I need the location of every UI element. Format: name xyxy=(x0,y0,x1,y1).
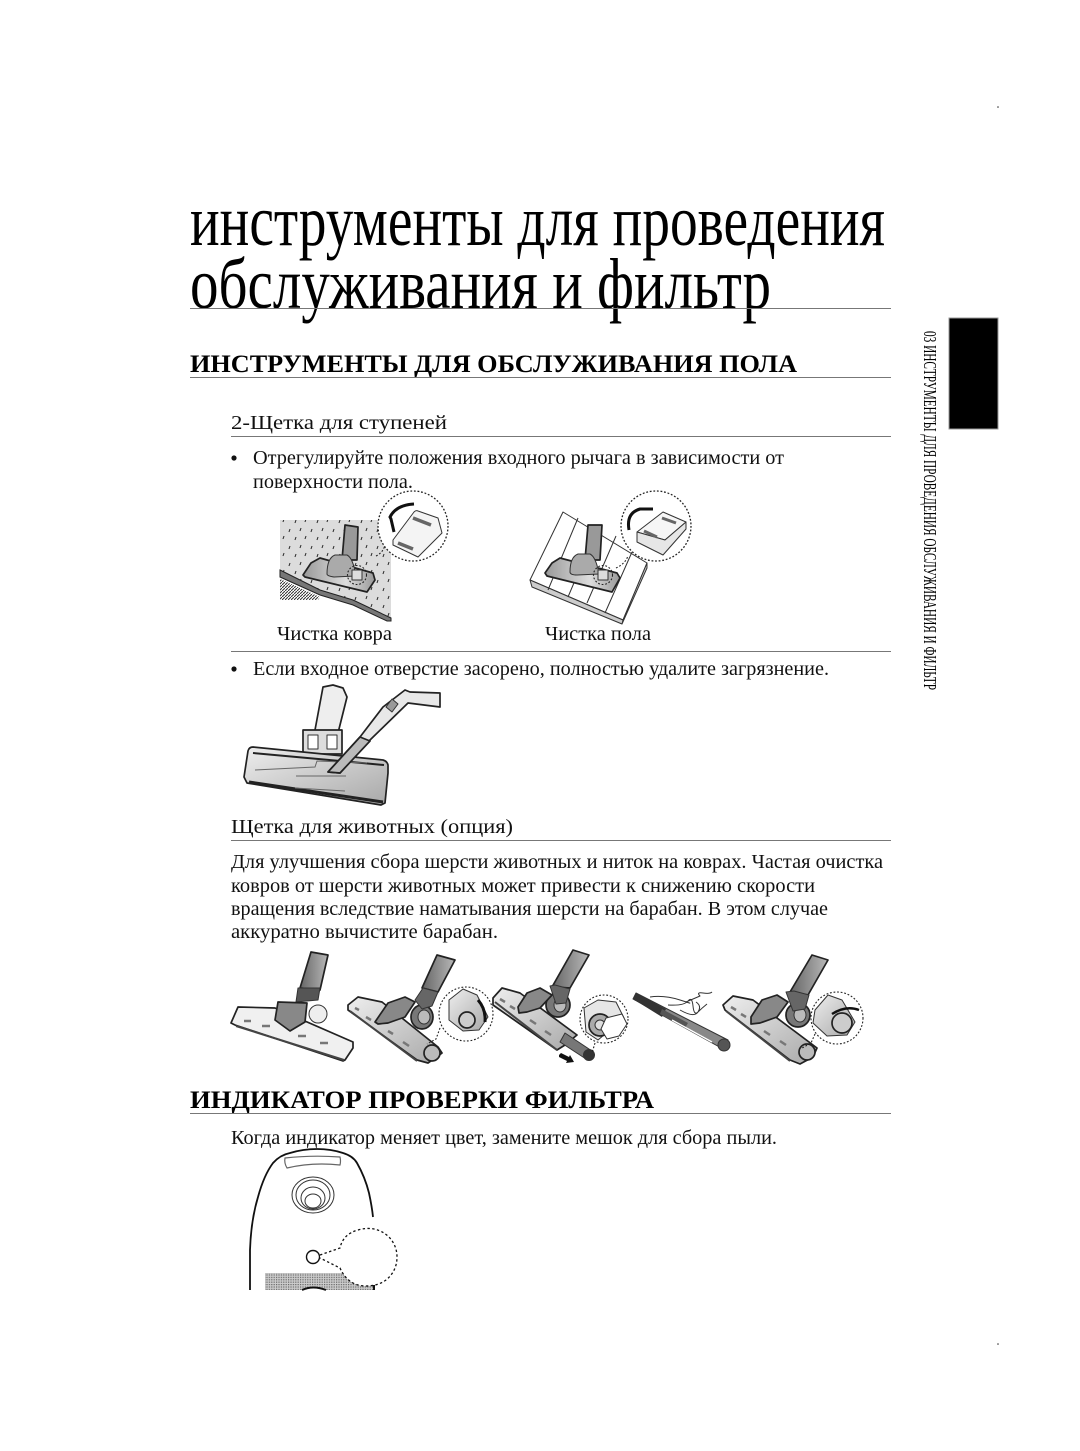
title: инструменты для проведения xyxy=(190,181,885,261)
title: обслуживания и фильтр xyxy=(190,244,771,324)
text block: pet brush description: ковров от шерсти животных может привести к снижению скорости xyxy=(231,875,815,897)
text block: pet brush description xyxy=(231,851,883,943)
title xyxy=(190,181,885,324)
illustration: pet brush step 5 xyxy=(723,955,863,1064)
text block: pet brush description: вращения вследствие наматывания шерсти на барабан. В этом случае xyxy=(231,898,828,920)
heading: filter indicator: ИНДИКАТОР ПРОВЕРКИ ФИЛЬТРА xyxy=(190,1087,654,1114)
caption: floor: Чистка пола xyxy=(545,623,651,645)
text block: adjust lever xyxy=(231,447,784,493)
illustration: cleaning the drum xyxy=(633,992,730,1051)
illustration: vacuum body xyxy=(250,1149,397,1290)
heading: floor tools: ИНСТРУМЕНТЫ ДЛЯ ОБСЛУЖИВАНИЯ ПОЛА xyxy=(190,351,797,378)
caption: carpet: Чистка ковра xyxy=(277,623,392,645)
subheading: stair brush: 2-Щетка для ступеней xyxy=(231,412,447,434)
illustration: pet brush step 1 xyxy=(231,952,353,1061)
illustration: carpet cleaning xyxy=(280,491,448,621)
text block: adjust lever: Отрегулируйте положения входного рычага в зависимости от xyxy=(253,447,784,469)
illustration: pet brush step 2 xyxy=(348,955,493,1063)
side tab xyxy=(949,318,998,429)
subheading: pet brush: Щетка для животных (опция) xyxy=(231,816,513,838)
text block: pet brush description: Для улучшения сбора шерсти животных и ниток на коврах. Частая очистка xyxy=(231,851,883,873)
illustration: pet brush step 3 xyxy=(493,950,628,1063)
text block: filter indicator: Когда индикатор меняет цвет, замените мешок для сбора пыли. xyxy=(231,1127,777,1149)
illustration: hard floor cleaning xyxy=(530,491,691,624)
side label: 03 ИНСТРУМЕНТЫ ДЛЯ ПРОВЕДЕНИЯ ОБСЛУЖИВАНИЯ И ФИЛЬТР xyxy=(920,331,940,690)
text block: adjust lever: поверхности пола. xyxy=(253,471,413,493)
text block: pet brush description: аккуратно вычистите барабан. xyxy=(231,921,498,943)
illustration: clearing the inlet xyxy=(244,685,440,805)
text block: clogged inlet: Если входное отверстие засорено, полностью удалите загрязнение. xyxy=(253,658,829,680)
